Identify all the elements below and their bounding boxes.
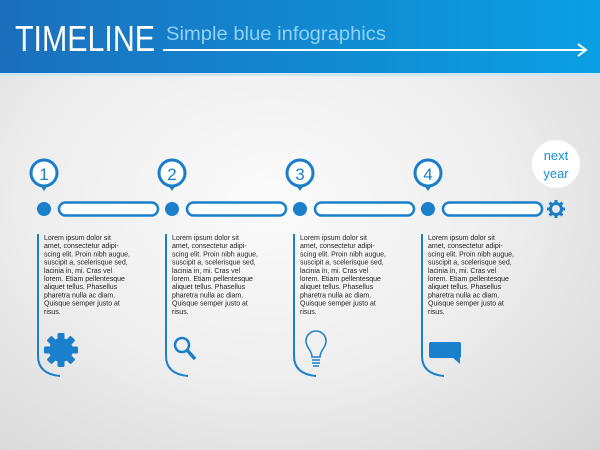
text 3: pharetra nulla ac diam. [300,292,371,299]
text 2: risus. [172,309,189,316]
text 3: Quisque semper justo at [300,301,376,308]
text 2: lorem. Etiam pellentesque [172,276,253,283]
icon: end gear [547,200,565,218]
text 3: Lorem ipsum dolor sit [300,235,367,242]
text 4: Lorem ipsum dolor sit [428,235,495,242]
pin 3 [287,160,313,191]
text 1: lacinia in, mi. Cras vel [44,268,113,275]
pin 1 [31,160,57,191]
arrow [163,44,586,56]
step 2 [159,160,286,376]
text 1: amet, consectetur adipi- [44,243,119,250]
text 4: lacinia in, mi. Cras vel [428,268,497,275]
text 3: lorem. Etiam pellentesque [300,276,381,283]
next year badge: year [543,166,569,181]
text 1: risus. [44,309,61,316]
step 1 [31,160,158,376]
icon: magnifier [175,338,195,359]
text 1: lorem. Etiam pellentesque [44,276,125,283]
pin 4: 4 [423,165,433,184]
text 2: scing elit. Proin nibh augue, [172,251,258,258]
title: TIMELINE [15,18,155,59]
text 2: aliquet tellus. Phasellus [172,284,246,291]
text 1: suscipit a, scelerisque sed, [44,260,128,267]
text 2: amet, consectetur adipi- [172,243,247,250]
text 3: suscipit a, scelerisque sed, [300,260,384,267]
text 4: pharetra nulla ac diam. [428,292,499,299]
text 3: risus. [300,309,317,316]
text 1: aliquet tellus. Phasellus [44,284,118,291]
next year badge [532,140,580,188]
step 3 [287,160,414,376]
text 4: risus. [428,309,445,316]
icon: speech bubble [429,342,461,364]
header banner [0,0,600,76]
text 4: lorem. Etiam pellentesque [428,276,509,283]
text 4: Quisque semper justo at [428,301,504,308]
text 1: Quisque semper justo at [44,301,120,308]
pin 4 [415,160,441,191]
icon: light bulb [306,331,326,366]
text 1: Lorem ipsum dolor sit [44,235,111,242]
subtitle: Simple blue infographics [166,24,386,45]
text 4: scing elit. Proin nibh augue, [428,251,514,258]
text 1: scing elit. Proin nibh augue, [44,251,130,258]
text 3: amet, consectetur adipi- [300,243,375,250]
text 3: lacinia in, mi. Cras vel [300,268,369,275]
text 4: suscipit a, scelerisque sed, [428,260,512,267]
text 4: amet, consectetur adipi- [428,243,503,250]
pin 2 [159,160,185,191]
pin 2: 2 [167,165,177,184]
text 2: lacinia in, mi. Cras vel [172,268,241,275]
step 4 [415,160,542,376]
text 2: pharetra nulla ac diam. [172,292,243,299]
text 2: Quisque semper justo at [172,301,248,308]
text 4: aliquet tellus. Phasellus [428,284,502,291]
text 1: pharetra nulla ac diam. [44,292,115,299]
pin 1: 1 [39,165,49,184]
text 2: suscipit a, scelerisque sed, [172,260,256,267]
text 3: scing elit. Proin nibh augue, [300,251,386,258]
next year badge: next [544,148,569,163]
icon: gear [44,333,78,367]
pin 3: 3 [295,165,305,184]
text 2: Lorem ipsum dolor sit [172,235,239,242]
text 3: aliquet tellus. Phasellus [300,284,374,291]
